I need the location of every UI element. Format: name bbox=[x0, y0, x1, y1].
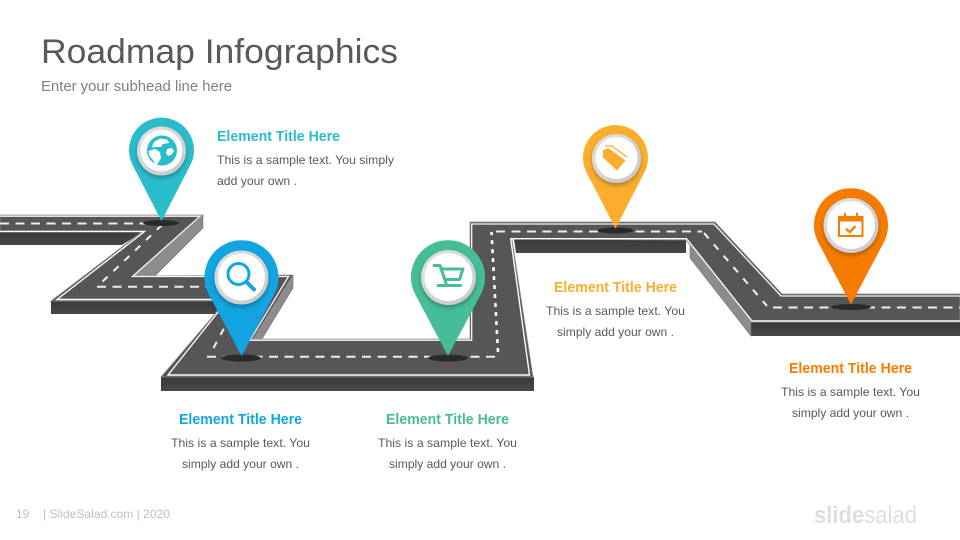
text block: teal element bbox=[217, 129, 394, 188]
text block: yellow element: simply add your own . bbox=[557, 325, 674, 339]
text block: orange element: This is a sample text. You bbox=[781, 385, 920, 399]
pin: yellow tag bbox=[583, 125, 648, 234]
winding road bbox=[0, 215, 960, 391]
text block: orange element bbox=[781, 361, 920, 420]
icon: calendar bbox=[838, 214, 864, 236]
subhead: Enter your subhead line here bbox=[41, 79, 232, 95]
title: Roadmap Infographics bbox=[41, 33, 398, 71]
text block: orange element: simply add your own . bbox=[792, 406, 909, 420]
footer page number and credit: | SlideSalad.com | 2020 bbox=[43, 507, 170, 521]
text block: blue element: simply add your own . bbox=[182, 457, 299, 471]
text block: blue element: Element Title Here bbox=[179, 412, 302, 428]
text block: green element: Element Title Here bbox=[386, 412, 509, 428]
pin: orange calendar bbox=[814, 188, 888, 310]
pin: blue search bbox=[204, 240, 278, 362]
pin: teal globe bbox=[129, 118, 194, 226]
text block: blue element: This is a sample text. You bbox=[171, 436, 310, 450]
text block: teal element: Element Title Here bbox=[217, 129, 340, 145]
icon: cart bbox=[434, 266, 463, 286]
text block: yellow element: Element Title Here bbox=[554, 280, 677, 296]
icon: price tag bbox=[603, 146, 627, 170]
text block: yellow element bbox=[546, 280, 685, 339]
text block: teal element: add your own . bbox=[217, 174, 297, 188]
footer page number and credit: 19 bbox=[16, 507, 30, 521]
text block: yellow element: This is a sample text. You bbox=[546, 304, 685, 318]
text block: orange element: Element Title Here bbox=[789, 361, 912, 377]
logo: slidesalad bbox=[814, 502, 917, 529]
text block: green element bbox=[378, 412, 517, 471]
pin: green cart bbox=[411, 240, 485, 362]
icon: magnifier bbox=[228, 264, 254, 290]
text block: green element: simply add your own . bbox=[389, 457, 506, 471]
icon: globe bbox=[147, 136, 177, 166]
text block: green element: This is a sample text. You bbox=[378, 436, 517, 450]
text block: blue element bbox=[171, 412, 310, 471]
text block: teal element: This is a sample text. You simply bbox=[217, 153, 394, 167]
